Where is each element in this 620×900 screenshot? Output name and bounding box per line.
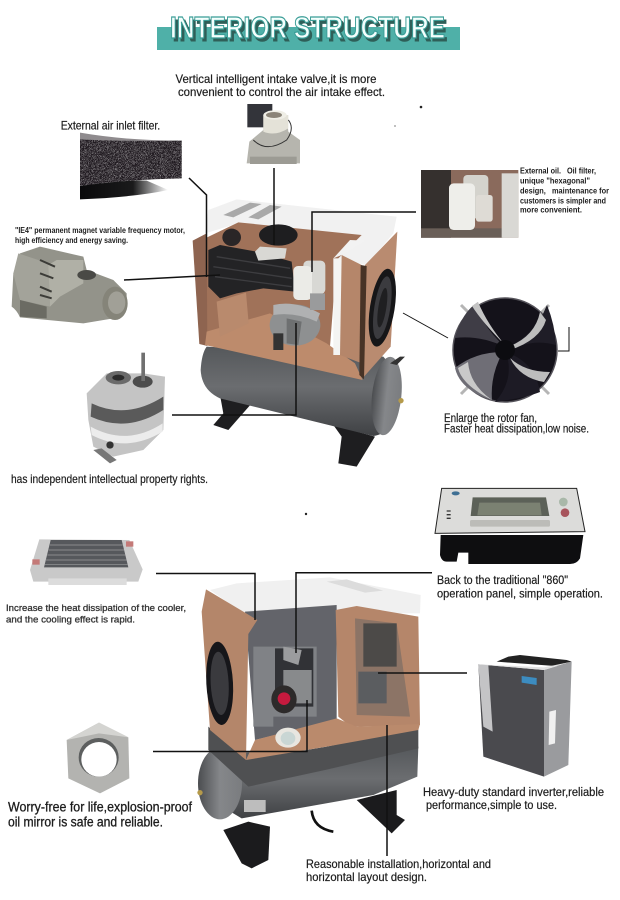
tank feet: [213, 395, 375, 467]
title: [157, 10, 460, 50]
callout text: operation panel: Back to the traditional "860": [437, 575, 568, 587]
tank end cap: [198, 747, 242, 819]
callout text: oil filter: design, maintenance for: [520, 185, 610, 195]
callout text: cooler: [6, 603, 186, 626]
cooling fan: [204, 641, 235, 726]
callout text: rotor fan: Faster heat dissipation,low noise.: [444, 424, 589, 436]
callout text: oil mirror: oil mirror is safe and reliable.: [8, 815, 163, 830]
icon: compressor head: [87, 353, 165, 463]
glass canopy: [205, 199, 397, 265]
fan blades: [455, 302, 505, 347]
callout text: installation layout: [306, 857, 491, 884]
cooling fan: [364, 267, 401, 348]
callout text: IE4 motor: [15, 225, 185, 245]
machine 2: air compressor on tank, front view: [197, 577, 421, 868]
tank feet: [223, 790, 405, 868]
intake valve assembly: [255, 247, 287, 261]
callout text: oil mirror: Worry-free for life,explosion-proof: [8, 800, 192, 815]
cabinet back wall: [205, 222, 362, 363]
right panel: [363, 232, 397, 377]
tank body: [213, 747, 418, 818]
callout text: IE4 motor: "IE4" permanent magnet variable frequency motor,: [15, 225, 185, 235]
oil mirror sight glass: [275, 728, 301, 748]
copper block: [217, 293, 249, 337]
title text: INTERIOR STRUCTURE: [170, 10, 445, 45]
fan hub: [495, 340, 515, 360]
icon: motor: [12, 247, 128, 323]
callout text: intellectual property: has independent intellectual property rights.: [11, 472, 208, 486]
callout text: inverter: Heavy-duty standard inverter,reliable: [423, 787, 604, 799]
callout text: cooler: and the cooling effect is rapid.: [6, 615, 135, 626]
callout text: oil filter: more convenient.: [520, 205, 582, 215]
callout text: oil filter: unique "hexagonal": [520, 175, 590, 185]
icon: inverter: [478, 655, 572, 777]
icon: intake valve: [247, 104, 300, 164]
tank end cap: [368, 355, 405, 437]
icon: heat cooler: [30, 539, 143, 585]
callout text: cooler: Increase the heat dissipation of the cooler,: [6, 603, 186, 614]
fan mounts: [461, 305, 549, 394]
title shadow: INTERIOR STRUCTURE: [172, 13, 448, 48]
cabinet base: [208, 727, 418, 787]
callout text: oil filter: External oil. Oil filter,: [520, 166, 596, 176]
cabinet floor: [205, 313, 363, 380]
callout text: operation panel: operation panel, simple operation.: [437, 589, 603, 601]
air hose: [312, 811, 333, 832]
callout text: intake valve: [176, 72, 385, 99]
title band: [157, 27, 460, 50]
callout lines for machine 2: [153, 573, 467, 856]
fan disc: [453, 298, 557, 402]
red oil gauge: [271, 685, 297, 713]
callout lines for machine 1: [124, 168, 569, 415]
callout text: intake valve: Vertical intelligent intake valve,it is more: [176, 72, 377, 86]
callout text: IE4 motor: high efficiency and energy saving.: [15, 235, 128, 245]
rear components: [222, 229, 241, 246]
cabinet floor: [246, 718, 420, 760]
icon: oil mirror nut: [67, 723, 129, 793]
motor: [208, 245, 295, 298]
callout text: rotor fan: Enlarge the rotor fan,: [444, 413, 537, 425]
specks: [305, 106, 422, 515]
compressor head: [270, 304, 320, 346]
callout text: air inlet filter: External air inlet filter.: [61, 118, 160, 132]
callout text: rotor fan: [444, 413, 589, 436]
machine 1: air compressor on tank, rear view: [193, 199, 405, 467]
icon: oil filter photo: [421, 170, 518, 238]
glass canopy: [210, 577, 421, 613]
callout text: installation layout: horizontal layout design.: [306, 870, 427, 884]
tank body: [201, 347, 400, 436]
cooler: [333, 240, 365, 258]
icon: foam air filter: [80, 133, 182, 199]
callout text: inverter: [423, 787, 604, 812]
icon: rotor fan: [453, 298, 557, 402]
callout text: installation layout: Reasonable installation,horizontal and: [306, 857, 491, 871]
callout text: intake valve: convenient to control the air intake effect.: [178, 85, 385, 99]
cabinet left panel: [202, 589, 257, 760]
cabinet interior: [245, 605, 337, 740]
icon: operation panel: [435, 488, 585, 564]
oil filters: [303, 261, 325, 294]
cabinet right panel: [336, 606, 420, 730]
callout text: inverter: performance,simple to use.: [426, 800, 557, 812]
callout text: operation panel: [437, 575, 603, 601]
callout text: oil filter: [520, 166, 610, 215]
cabinet left panel: [193, 233, 207, 346]
callout text: oil filter: customers is simpler and: [520, 195, 606, 205]
callout text: oil mirror: [8, 800, 192, 830]
